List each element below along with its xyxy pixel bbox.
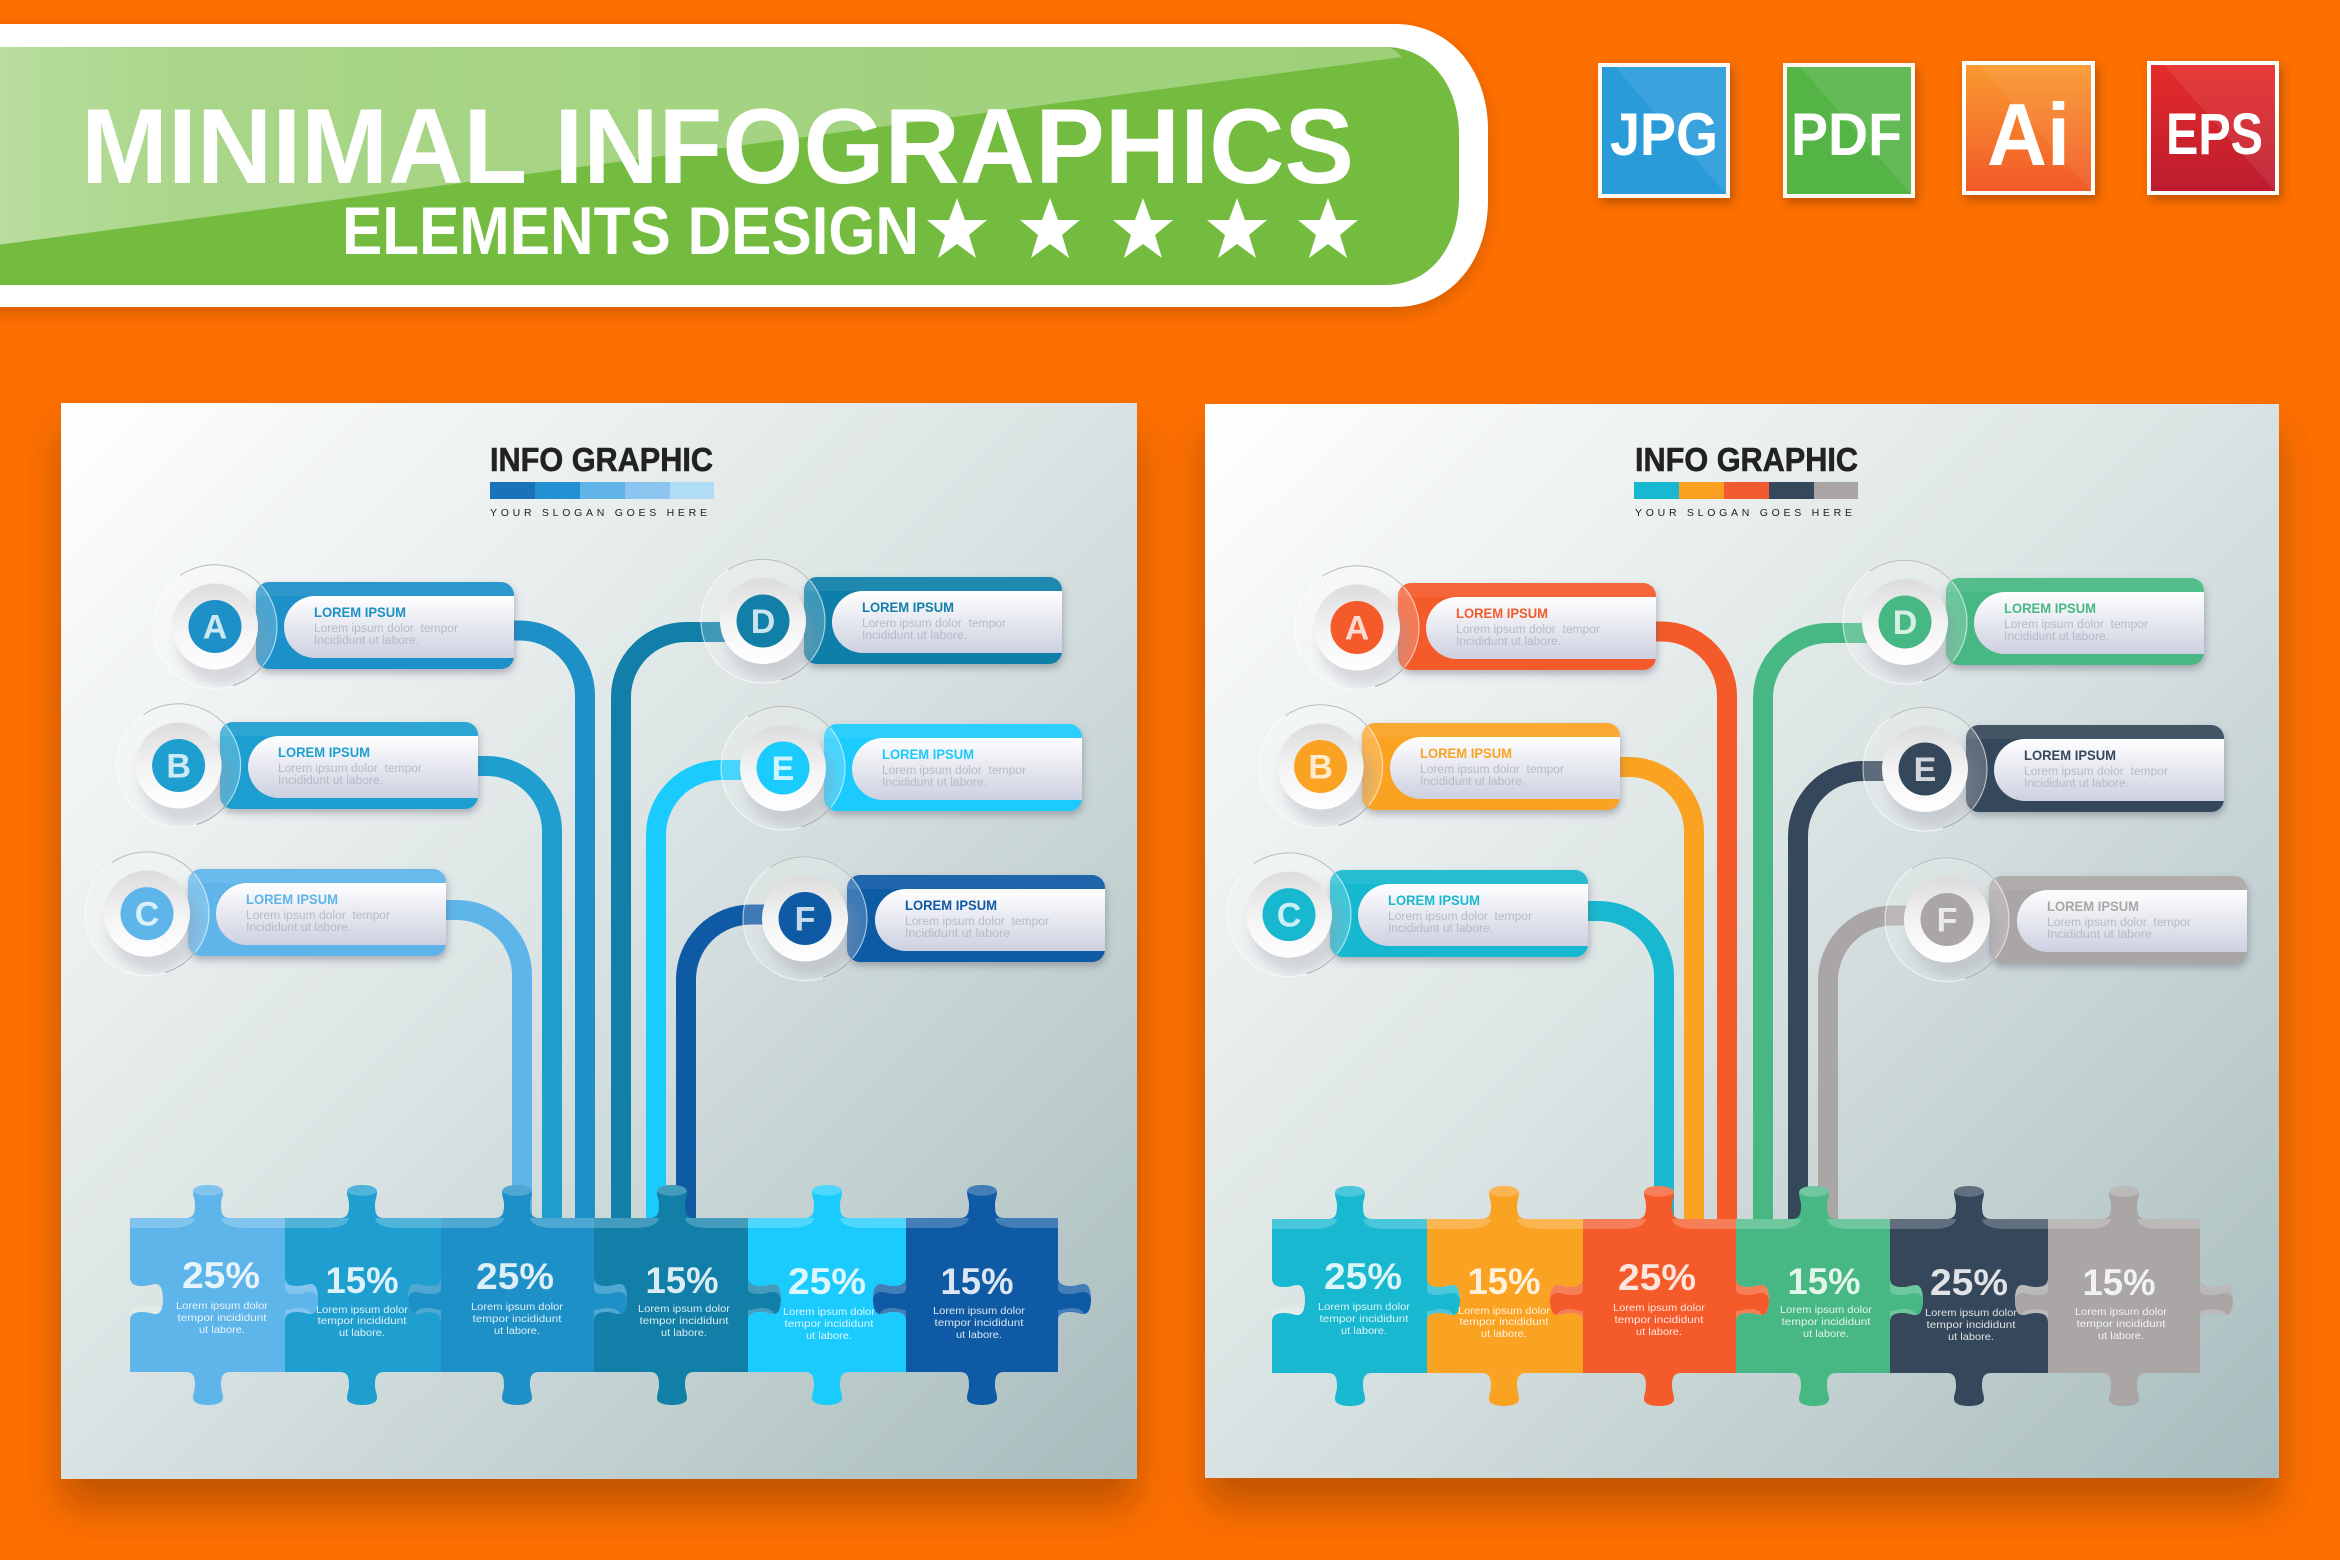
callout C [85, 852, 446, 976]
panel background [1205, 404, 2279, 1478]
puzzle piece: E 25% [748, 1185, 906, 1405]
puzzle piece: F 15%: Lorem ipsum dolor [2075, 1306, 2168, 1318]
callout E [1863, 707, 2224, 831]
puzzle piece: B 15%: 15% [326, 1259, 398, 1301]
callout C: Incididunt ut labore. [246, 922, 351, 934]
callout E: LOREM IPSUM [882, 746, 974, 762]
slogan: YOUR SLOGAN GOES HERE [490, 507, 707, 519]
puzzle piece: B 15%: tempor incididunt [318, 1315, 407, 1327]
puzzle piece: F 15%: ut labore. [956, 1329, 1002, 1341]
callout B [1259, 704, 1620, 828]
icon: JPG format: JPG [1610, 101, 1718, 168]
puzzle piece: C 25% [1272, 1186, 1460, 1406]
puzzle piece: D 15%: tempor incididunt [1782, 1316, 1871, 1328]
puzzle piece: A 25% [408, 1185, 627, 1405]
callout D [701, 559, 1062, 683]
puzzle piece: D 15%: 15% [1788, 1260, 1860, 1302]
puzzle piece: E 25%: 25% [1930, 1261, 2008, 1303]
puzzle piece: D 15%: Lorem ipsum dolor [1780, 1304, 1873, 1316]
callout F: Incididunt ut labore [2047, 929, 2152, 941]
puzzle piece: B 15%: ut labore. [1481, 1328, 1527, 1340]
callout D: LOREM IPSUM [2004, 600, 2096, 616]
callout E: Lorem ipsum dolor tempor [2024, 766, 2168, 778]
puzzle piece: A 25%: ut labore. [1636, 1326, 1682, 1338]
panel: multicolour infographic [1205, 404, 2279, 1478]
puzzle piece: B 15%: ut labore. [339, 1327, 385, 1339]
connector lines [1588, 632, 1947, 1223]
callout C: LOREM IPSUM [1388, 892, 1480, 908]
icon: EPS format: EPS [2166, 102, 2263, 167]
puzzle piece: C 25%: ut labore. [199, 1324, 245, 1336]
callout B: B [166, 748, 191, 786]
puzzle piece: C 25%: Lorem ipsum dolor [176, 1300, 269, 1312]
callout C: C [135, 896, 159, 934]
puzzle piece: C 25%: 25% [1324, 1255, 1402, 1297]
callout F: LOREM IPSUM [2047, 898, 2139, 914]
callout F [1885, 858, 2247, 982]
callout A: Lorem ipsum dolor tempor [1456, 624, 1600, 636]
puzzle piece: F 15%: tempor incididunt [934, 1317, 1024, 1329]
callout A: LOREM IPSUM [1456, 605, 1548, 621]
callout B: Incididunt ut labore. [278, 775, 383, 787]
callout C: Lorem ipsum dolor tempor [1388, 911, 1532, 923]
panel: blue infographic [61, 403, 1137, 1479]
callout B: LOREM IPSUM [278, 744, 370, 760]
puzzle piece: D 15%: Lorem ipsum dolor [638, 1303, 731, 1315]
callout C: Incididunt ut labore. [1388, 923, 1493, 935]
callout D: Incididunt ut labore. [2004, 631, 2109, 643]
puzzle piece: B 15%: Lorem ipsum dolor [1458, 1305, 1551, 1317]
callout F: F [1937, 902, 1957, 940]
callout D: Lorem ipsum dolor tempor [2004, 619, 2148, 631]
puzzle piece: C 25%: tempor incididunt [1320, 1313, 1409, 1325]
puzzle piece: E 25%: ut labore. [806, 1330, 852, 1342]
callout B: Lorem ipsum dolor tempor [1420, 764, 1564, 776]
puzzle piece: B 15%: Lorem ipsum dolor [316, 1304, 409, 1316]
slogan: YOUR SLOGAN GOES HERE [1635, 507, 1852, 519]
puzzle piece: C 25%: tempor incididunt [178, 1312, 267, 1324]
callout B [117, 704, 478, 828]
puzzle piece: B 15% [285, 1185, 441, 1405]
callout D: D [1893, 604, 1917, 642]
puzzle piece: A 25%: ut labore. [494, 1325, 540, 1337]
heading: INFO GRAPHIC [1635, 441, 1858, 478]
icon: PDF format [1783, 63, 1915, 198]
puzzle piece: D 15%: tempor incididunt [640, 1315, 729, 1327]
callout A: Incididunt ut labore. [1456, 636, 1561, 648]
puzzle piece: C 25% [130, 1185, 318, 1405]
puzzle piece: F 15% [2015, 1186, 2233, 1406]
puzzle piece: B 15% [1427, 1186, 1583, 1406]
callout A [1295, 566, 1656, 690]
callout D: LOREM IPSUM [862, 599, 954, 615]
callout C: C [1277, 897, 1301, 935]
puzzle piece: E 25%: Lorem ipsum dolor [783, 1306, 876, 1318]
puzzle piece: E 25%: ut labore. [1948, 1331, 1994, 1343]
puzzle piece: A 25%: 25% [476, 1255, 554, 1297]
callout B: Lorem ipsum dolor tempor [278, 763, 422, 775]
connector lines [446, 630, 805, 1222]
callout E: LOREM IPSUM [2024, 747, 2116, 763]
icon: Ai format [1962, 61, 2095, 195]
puzzle piece: F 15%: 15% [940, 1260, 1014, 1302]
panel background [61, 403, 1137, 1479]
callout A: Incididunt ut labore. [314, 635, 419, 647]
puzzle piece: E 25% [1890, 1186, 2048, 1406]
callout C: LOREM IPSUM [246, 891, 338, 907]
puzzle piece: F 15%: tempor incididunt [2076, 1318, 2166, 1330]
icon: Ai format: Ai [1987, 85, 2070, 184]
callout A: Lorem ipsum dolor tempor [314, 623, 458, 635]
callout F [743, 856, 1105, 980]
callout F: F [795, 900, 815, 938]
puzzle piece: C 25%: 25% [182, 1254, 260, 1296]
callout E: Incididunt ut labore. [2024, 778, 2129, 790]
icon: JPG format [1598, 63, 1730, 198]
puzzle piece: D 15%: ut labore. [1803, 1328, 1849, 1340]
puzzle piece: B 15%: 15% [1468, 1260, 1540, 1302]
icon: EPS format [2147, 61, 2279, 195]
puzzle piece: D 15% [594, 1185, 781, 1405]
puzzle piece: A 25%: 25% [1618, 1256, 1696, 1298]
puzzle piece: A 25% [1550, 1186, 1769, 1406]
puzzle piece: A 25%: tempor incididunt [472, 1313, 562, 1325]
puzzle piece: F 15% [873, 1185, 1091, 1405]
callout E: E [1914, 751, 1936, 789]
callout F: LOREM IPSUM [905, 897, 997, 913]
callout A [153, 564, 514, 688]
callout C: Lorem ipsum dolor tempor [246, 910, 390, 922]
callout A: A [203, 608, 227, 646]
colour bar [490, 482, 714, 499]
callout F: Lorem ipsum dolor tempor [2047, 917, 2191, 929]
puzzle piece: D 15%: 15% [646, 1259, 718, 1301]
callout D: Lorem ipsum dolor tempor [862, 618, 1006, 630]
puzzle piece: F 15%: 15% [2082, 1261, 2156, 1303]
five star rating [927, 198, 1358, 258]
puzzle piece: A 25%: Lorem ipsum dolor [1613, 1302, 1706, 1314]
callout B: LOREM IPSUM [1420, 745, 1512, 761]
callout D: Incididunt ut labore. [862, 630, 967, 642]
header banner [0, 24, 1488, 307]
colour bar [1634, 482, 1858, 499]
puzzle piece: D 15% [1736, 1186, 1923, 1406]
heading: INFO GRAPHIC [490, 441, 713, 478]
puzzle piece: A 25%: Lorem ipsum dolor [471, 1301, 564, 1313]
callout E: Lorem ipsum dolor tempor [882, 765, 1026, 777]
callout E: Incididunt ut labore. [882, 777, 987, 789]
puzzle piece: E 25%: tempor incididunt [784, 1318, 874, 1330]
callout B: Incididunt ut labore. [1420, 776, 1525, 788]
puzzle piece: F 15%: Lorem ipsum dolor [933, 1305, 1026, 1317]
callout D: D [751, 603, 775, 641]
puzzle piece: E 25%: tempor incididunt [1926, 1319, 2016, 1331]
callout A: LOREM IPSUM [314, 604, 406, 620]
callout F: Incididunt ut labore [905, 928, 1010, 940]
callout D [1843, 560, 2204, 684]
puzzle piece: E 25%: Lorem ipsum dolor [1925, 1307, 2018, 1319]
callout E: E [772, 750, 794, 788]
puzzle piece: A 25%: tempor incididunt [1614, 1314, 1704, 1326]
puzzle piece: D 15%: ut labore. [661, 1327, 707, 1339]
callout C [1227, 853, 1588, 977]
callout B: B [1308, 748, 1333, 786]
puzzle piece: F 15%: ut labore. [2098, 1330, 2144, 1342]
puzzle piece: C 25%: ut labore. [1341, 1325, 1387, 1337]
subtitle: ELEMENTS DESIGN [342, 193, 919, 269]
puzzle piece: B 15%: tempor incididunt [1460, 1316, 1549, 1328]
icon: PDF format: PDF [1791, 101, 1902, 168]
callout A: A [1345, 610, 1369, 648]
callout F: Lorem ipsum dolor tempor [905, 916, 1049, 928]
puzzle piece: C 25%: Lorem ipsum dolor [1318, 1301, 1411, 1313]
callout E [721, 706, 1082, 830]
puzzle piece: E 25%: 25% [788, 1260, 866, 1302]
main title: MINIMAL INFOGRAPHICS [81, 86, 1354, 206]
